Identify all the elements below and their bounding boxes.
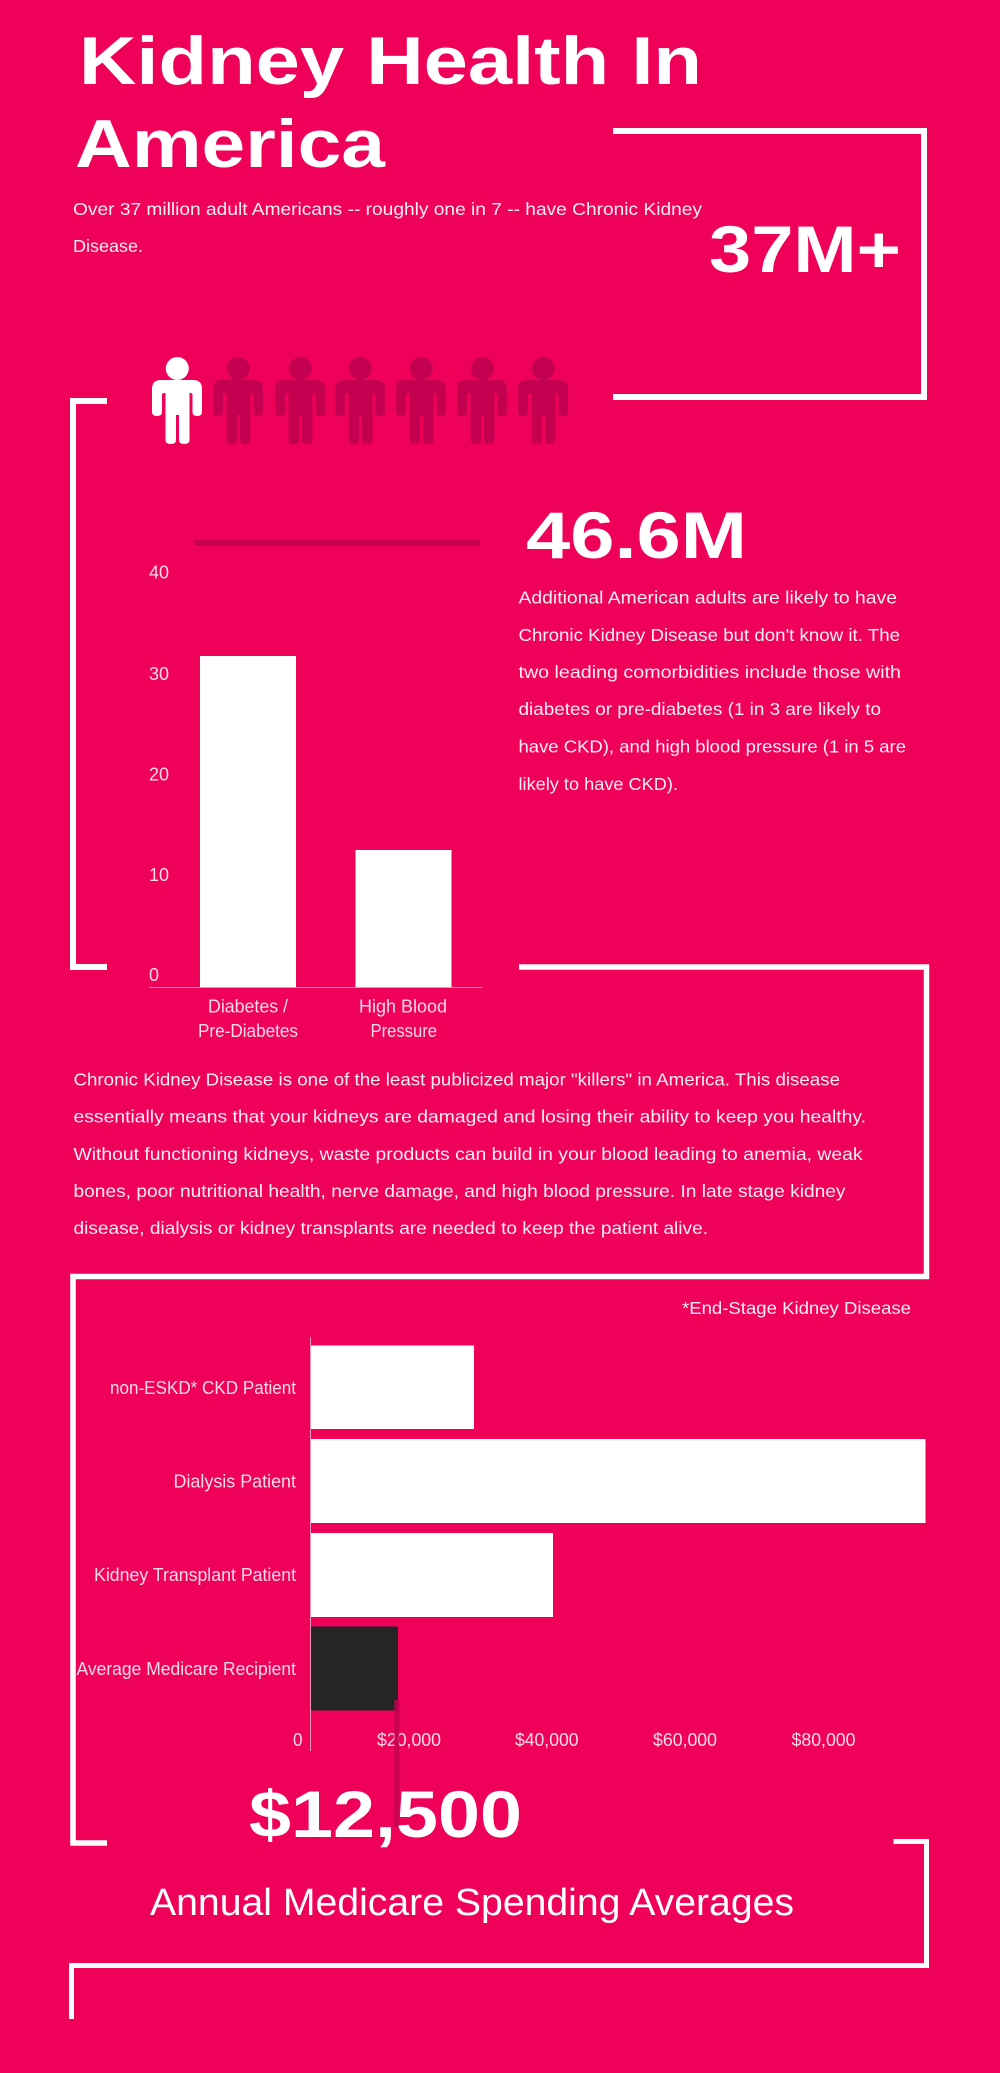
title: Kidney Health In [79, 23, 702, 99]
y axis labels: 30 [149, 663, 169, 684]
x axis tick labels: 0 [293, 1729, 302, 1750]
x axis tick labels: $80,000 [792, 1729, 856, 1750]
text: what CKD means: Without functioning kidneys, waste products can build in your blood leading to anemia, weak [74, 1144, 863, 1164]
stat: 37M+: 37M+ [709, 212, 901, 286]
row: dialysis patient: Dialysis Patient [174, 1470, 296, 1492]
icon: highlighted person [152, 357, 202, 444]
bar: high blood pressure [356, 850, 452, 987]
y axis labels: 10 [149, 864, 169, 885]
row: kidney transplant patient: Kidney Transplant Patient [94, 1564, 296, 1585]
text: undiagnosed adults: diabetes or pre-diabetes (1 in 3 are likely to [518, 699, 881, 719]
text: what CKD means: disease, dialysis or kidney transplants are needed to keep the patient alive. [74, 1218, 708, 1238]
text: undiagnosed adults: two leading comorbidities include those with [518, 662, 901, 682]
x axis labels [198, 996, 447, 1041]
intro text: Over 37 million adult Americans -- roughly one in 7 -- have Chronic Kidney [73, 199, 702, 219]
footnote: *End-Stage Kidney Disease [682, 1298, 911, 1318]
text: what CKD means: bones, poor nutritional health, nerve damage, and high blood pressure. In late stage kidney [74, 1181, 846, 1201]
bar: diabetes [200, 656, 296, 987]
intro text: Disease. [73, 236, 143, 256]
text: undiagnosed adults: have CKD), and high blood pressure (1 in 5 are [518, 736, 906, 756]
title: America [75, 106, 386, 182]
text: what CKD means [74, 1070, 866, 1238]
y axis line [310, 1337, 311, 1751]
x axis line [149, 987, 482, 988]
text: undiagnosed adults: Additional American adults are likely to have [518, 588, 897, 608]
bar chart: Medicare spending [76, 1337, 926, 1751]
x axis labels: Pre-Diabetes [198, 1020, 298, 1041]
bracket: 37M top right [613, 131, 924, 397]
frame: chart title [72, 1842, 926, 2019]
row: average Medicare recipient [76, 1626, 398, 1710]
row: non-ESKD CKD patient: non-ESKD* CKD Patient [110, 1377, 296, 1398]
x axis labels: Diabetes / [208, 996, 289, 1016]
y axis labels: 40 [149, 562, 169, 582]
intro text [73, 199, 702, 256]
chart title: Annual Medicare Spending Averages [150, 1882, 794, 1924]
row: dialysis patient [174, 1439, 926, 1523]
leader line to average bar [394, 1700, 399, 1827]
accent line above chart [194, 540, 480, 546]
bracket: left of diabetes chart [73, 401, 107, 967]
y axis labels [149, 562, 169, 985]
x axis labels: Pressure [370, 1020, 437, 1041]
x axis tick labels: $60,000 [653, 1729, 717, 1750]
row: average Medicare recipient: Average Medicare Recipient [76, 1658, 296, 1679]
stat: $12,500: $12,500 [249, 1777, 522, 1851]
x axis tick labels: $20,000 [377, 1729, 441, 1750]
icon: muted people [213, 357, 568, 444]
bar chart: comorbidities [149, 562, 482, 1041]
row: non-ESKD CKD patient [110, 1346, 474, 1429]
x axis tick labels [293, 1729, 856, 1750]
x axis labels: High Blood [359, 996, 447, 1016]
stat: 46.6M: 46.6M [526, 498, 747, 572]
icon row: one in seven people [152, 357, 568, 444]
row: kidney transplant patient [94, 1533, 553, 1617]
text: what CKD means: Chronic Kidney Disease is one of the least publicized major "killers" in America. This disease [74, 1070, 840, 1090]
text: what CKD means: essentially means that your kidneys are damaged and losing their ability to keep you healthy. [74, 1107, 866, 1127]
x axis tick labels: $40,000 [515, 1729, 578, 1750]
y axis labels: 0 [149, 964, 159, 985]
frame: explanation panel [73, 967, 926, 1843]
text: undiagnosed adults [518, 588, 906, 794]
y axis labels: 20 [149, 764, 169, 784]
text: undiagnosed adults: likely to have CKD). [518, 774, 678, 794]
text: undiagnosed adults: Chronic Kidney Disease but don't know it. The [518, 625, 900, 645]
title [75, 23, 702, 182]
